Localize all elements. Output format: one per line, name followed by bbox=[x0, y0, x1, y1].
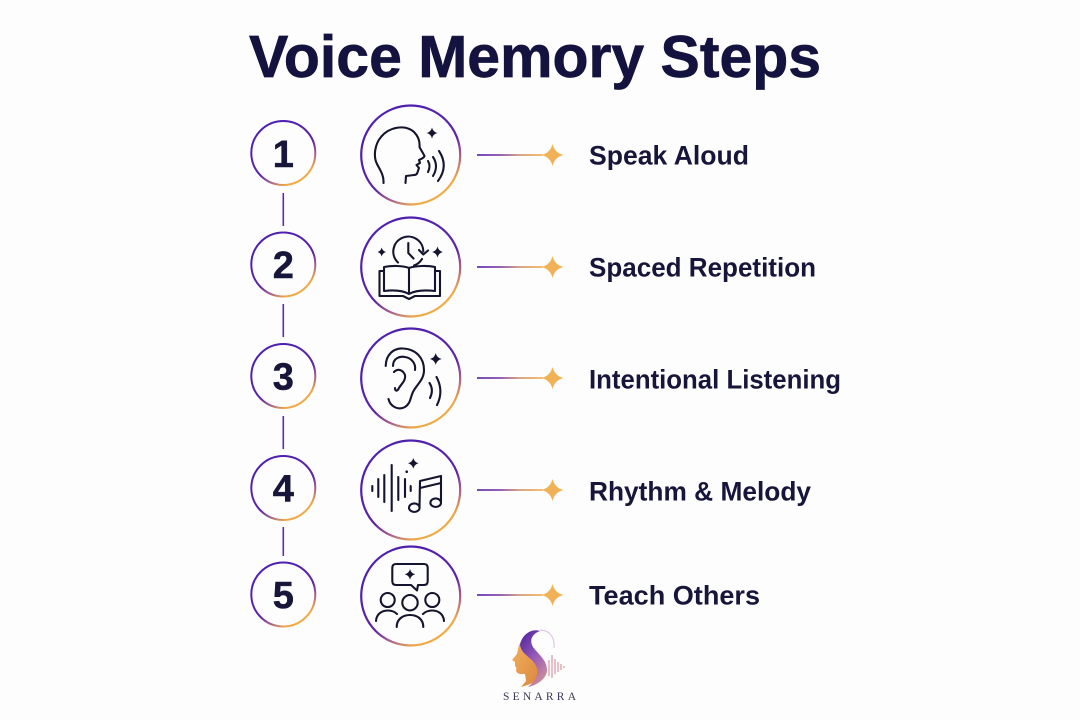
icon: group and speech bubble bbox=[361, 546, 460, 646]
icon: sound wave and music notes bbox=[361, 440, 460, 540]
arrow with star bbox=[477, 144, 564, 166]
connector: step 2 to 3 bbox=[282, 304, 284, 337]
number badge 3 bbox=[251, 344, 315, 408]
logo wordmark: SENARRA bbox=[503, 691, 577, 703]
icon: ear with sound bbox=[361, 328, 460, 428]
arrow with star bbox=[477, 584, 564, 606]
number badge 2: 2 bbox=[273, 245, 294, 287]
number badge 5 bbox=[251, 562, 315, 626]
connector: step 4 to 5 bbox=[282, 527, 284, 556]
connector: step 3 to 4 bbox=[282, 416, 284, 449]
step 2: Spaced Repetition bbox=[251, 218, 816, 316]
number badge 5: 5 bbox=[273, 575, 294, 617]
logo mark: profile with hair and sound wave bbox=[512, 630, 564, 687]
step 4: Rhythm & Melody bbox=[251, 440, 811, 540]
title: Voice Memory Steps bbox=[249, 24, 821, 90]
label: Teach Others: Teach Others bbox=[589, 580, 760, 610]
logo: Senarra bbox=[503, 630, 577, 703]
number badge 3: 3 bbox=[273, 356, 294, 398]
icon: speaking head bbox=[361, 106, 460, 204]
label: Rhythm & Melody: Rhythm & Melody bbox=[589, 476, 811, 506]
label: Speak Aloud: Speak Aloud bbox=[589, 140, 749, 170]
number badge 4 bbox=[251, 456, 315, 520]
arrow with star bbox=[477, 367, 564, 389]
number badge 2 bbox=[251, 232, 315, 296]
arrow with star bbox=[477, 479, 564, 501]
number badge 1: 1 bbox=[273, 134, 294, 176]
step 1: Speak Aloud bbox=[251, 106, 749, 204]
arrow with star bbox=[477, 256, 564, 278]
icon: book and clock bbox=[361, 218, 460, 316]
step 3: Intentional Listening bbox=[251, 328, 841, 428]
number badge 1 bbox=[251, 121, 315, 185]
connector: step 1 to 2 bbox=[282, 193, 284, 226]
label: Intentional Listening: Intentional Listening bbox=[589, 364, 841, 394]
label: Spaced Repetition: Spaced Repetition bbox=[589, 252, 816, 282]
number badge 4: 4 bbox=[273, 468, 294, 510]
step 5: Teach Others bbox=[251, 546, 760, 646]
